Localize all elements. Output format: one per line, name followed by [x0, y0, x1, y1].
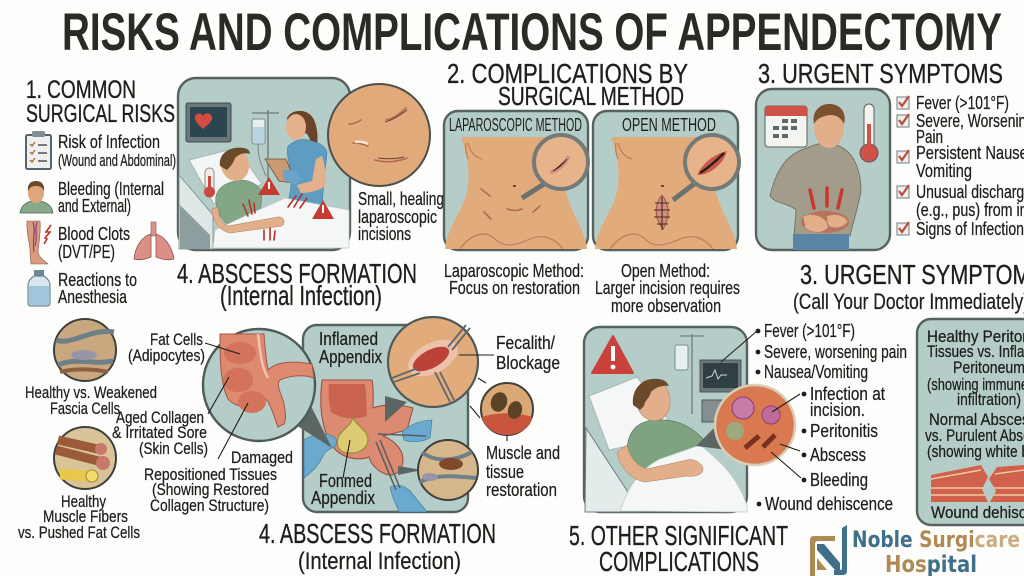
- icon: calendar: [765, 106, 807, 147]
- logo: noble surgicare hospital: [810, 525, 1020, 576]
- icon: person: [20, 181, 53, 213]
- icon: magnified incisions: [328, 84, 430, 186]
- heading: abscess formation upper: [177, 258, 417, 311]
- text: formed appendix label: Fonmed: [319, 471, 372, 491]
- icon: bottle: [28, 270, 50, 306]
- heading: complications by surgical method: SURGICAL METHOD: [498, 81, 684, 111]
- icon: fascia cells circle: [54, 319, 116, 381]
- icon: magnified infected cells: [696, 385, 795, 465]
- text: method captions: Focus on restoration: [449, 278, 580, 298]
- text: muscle restoration label: tissue: [486, 462, 524, 482]
- illustration: nurse: [265, 111, 327, 208]
- illustration: laparoscopic torso: [445, 137, 587, 249]
- list: symptom bullets: Fever (>101°F): [764, 321, 855, 341]
- text: bleeding: and External): [58, 196, 131, 216]
- list: symptom bullets: Peritonitis: [810, 421, 878, 441]
- icon: fecalith circle: [481, 383, 533, 435]
- illustration: open torso: [595, 137, 737, 249]
- list: symptom bullets: [721, 321, 907, 514]
- icon: heart monitor: [186, 103, 231, 142]
- text: small healing incisions: [358, 189, 444, 244]
- panel: abscess surgery: [303, 325, 468, 512]
- text: muscle caption: Healthy: [61, 493, 107, 511]
- heading: complications by surgical method: 2. COMPLICATIONS BY: [447, 58, 688, 89]
- illustration: bed and pillow: [179, 148, 262, 249]
- icon: magnified forceps circle: [385, 317, 478, 422]
- text: aged collagen label: & Irritated Sore: [112, 424, 207, 442]
- text: method captions: Larger incision requires: [595, 278, 740, 298]
- icon: red pain marks: [243, 194, 307, 240]
- text: fascia caption: Fascia Cells: [50, 400, 120, 418]
- text: fecalith label: Fecalith/: [496, 333, 555, 353]
- text: reactions to anesthesia: Reactions to: [58, 270, 137, 290]
- text: fascia caption: [25, 384, 157, 418]
- list: symptom bullets: Infection at: [810, 384, 885, 404]
- text: method captions: more observation: [611, 296, 721, 316]
- icon: warning triangles: [258, 177, 334, 219]
- text: damaged repositioned tissues label: Repositioned Tissues: [144, 466, 277, 484]
- text: laparoscopic method label: LAPAROSCOPIC METHOD: [449, 115, 582, 135]
- text: reactions to anesthesia: [58, 270, 137, 307]
- icon: iv drip: [252, 110, 279, 180]
- illustration: gloved hands and forceps: [304, 420, 432, 512]
- text: risk of infection: Risk of Infection: [58, 132, 160, 152]
- text: bleeding: [58, 179, 164, 216]
- text: abscess comparison: [925, 411, 1024, 461]
- icon: lungs: [134, 222, 174, 260]
- heading: abscess formation lower: (Internal Infection): [298, 548, 461, 575]
- panel: laparoscopic method: [444, 111, 588, 250]
- text: open method label: OPEN METHOD: [622, 115, 716, 135]
- illustration: man in pain: [770, 104, 861, 250]
- illustration: bed and pillow: [585, 377, 679, 512]
- illustration: iv and monitor: [675, 334, 741, 422]
- text: fat cells label: [128, 331, 205, 365]
- text: formed appendix label: Appendix: [311, 488, 375, 508]
- text: damaged repositioned tissues label: (Showing Restored: [152, 481, 269, 499]
- text: logo wordmark: Noble Surgicare: [852, 528, 1020, 553]
- illustration: patient: [212, 146, 349, 248]
- text: method captions: Laparoscopic Method:: [444, 261, 584, 281]
- list: symptom bullets: Severe, worsening pain: [764, 342, 907, 362]
- heading: complications by surgical method: [447, 58, 688, 111]
- heading: urgent symptoms lower: [793, 259, 1024, 314]
- list: symptom bullets: Wound dehiscence: [765, 494, 893, 514]
- bullets: [756, 329, 806, 506]
- text: method captions: Open Method:: [621, 261, 710, 281]
- heading: abscess formation upper: (Internal Infection): [220, 280, 382, 311]
- text: inflamed appendix label: Appendix: [319, 347, 382, 367]
- text: fecalith label: [496, 333, 560, 373]
- text: inflamed appendix label: Inflamed: [319, 329, 378, 349]
- text: small healing incisions: laparoscopic: [358, 207, 437, 227]
- icon: restored tissue circle: [398, 440, 478, 500]
- text: muscle caption: [18, 493, 140, 542]
- heading: abscess formation upper: 4. ABSCESS FORMATION: [177, 258, 417, 289]
- text: aged collagen label: [112, 409, 208, 458]
- text: aged collagen label: Aged Collagen: [116, 409, 204, 427]
- icon: magnifier on open wound: [673, 135, 739, 200]
- icon: thermometer: [204, 168, 215, 198]
- illustration: torn tissue layers: [931, 465, 1024, 502]
- checklist: urgent symptoms: [897, 93, 1024, 239]
- text: risk of infection: (Wound and Abdominal): [58, 152, 176, 170]
- leader lines: abscess labels: [205, 343, 507, 459]
- text: damaged repositioned tissues label: Collagen Structure): [150, 497, 269, 515]
- text: blood clots: (DVT/PE): [58, 242, 115, 262]
- text: damaged repositioned tissues label: Damaged: [231, 449, 293, 467]
- text: blood clots: Blood Clots: [58, 224, 130, 244]
- icons: check boxes: [897, 96, 909, 235]
- text: small healing incisions: Small, healing: [358, 189, 444, 209]
- text: muscle caption: Muscle Fibers: [43, 508, 128, 526]
- heading: abscess formation lower: [259, 518, 496, 575]
- text: fat cells label: (Adipocytes): [128, 347, 205, 365]
- heading: other significant complications: [569, 520, 788, 576]
- panel: hospital scene with nurse: [178, 78, 350, 250]
- list: symptom bullets: Nausea/Vomiting: [764, 362, 868, 382]
- icon: clipboard: [26, 131, 51, 169]
- text: damaged repositioned tissues label: [144, 449, 293, 515]
- text: blood clots: [58, 224, 130, 262]
- checklist: urgent symptoms: Pain: [916, 127, 943, 147]
- icon: leg with veins: [27, 221, 51, 264]
- text: peritoneal tissue comparison: [927, 328, 1024, 409]
- heading: common surgical risks: SURGICAL RISKS: [26, 100, 175, 128]
- heading: common surgical risks: [26, 76, 175, 128]
- list: symptom bullets: Bleeding: [810, 470, 868, 490]
- illustration: patient: [617, 376, 747, 512]
- text: bleeding: Bleeding (Internal: [58, 179, 164, 199]
- text: aged collagen label: (Skin Cells): [139, 440, 208, 458]
- icon: logo mark: [810, 525, 847, 576]
- text: inflamed appendix label: [319, 329, 382, 367]
- icon: callout pointer to colon: [296, 404, 332, 448]
- text: fascia caption: Healthy vs. Weakened: [25, 384, 157, 402]
- icon: magnifier on small incision: [522, 135, 588, 198]
- text: muscle caption: vs. Pushed Fat Cells: [18, 524, 140, 542]
- list: symptom bullets: incision.: [810, 400, 865, 420]
- list: symptom bullets: Abscess: [810, 445, 866, 465]
- text: risk of infection: [58, 132, 176, 170]
- text: fecalith label: Blockage: [496, 353, 560, 373]
- text: method captions: [444, 261, 740, 316]
- panel: common surgical risks: [20, 76, 176, 307]
- icon: magnified colon circle: [203, 329, 315, 441]
- text: logo wordmark: [852, 528, 1020, 576]
- icon: muscle fibers circle: [54, 427, 116, 489]
- text: muscle restoration label: Muscle and: [486, 443, 560, 463]
- icon: warning triangle: [592, 336, 633, 373]
- checklist: urgent symptoms: Vomiting: [916, 161, 972, 181]
- heading: common surgical risks: 1. COMMON: [26, 76, 136, 104]
- text: muscle restoration label: restoration: [486, 480, 557, 500]
- text: reactions to anesthesia: Anesthesia: [58, 287, 128, 307]
- panel: man with abdominal pain: [756, 89, 890, 250]
- icon: thermometer: [860, 104, 878, 162]
- panel: open method: [593, 111, 739, 250]
- text: fat cells label: Fat Cells: [150, 331, 203, 349]
- text: muscle restoration label: [486, 443, 560, 500]
- heading: other significant complications: 5. OTHER SIGNIFICANT: [569, 520, 788, 551]
- heading: abscess formation lower: 4. ABSCESS FORMATION: [259, 518, 496, 549]
- text: small healing incisions: incisions: [358, 224, 411, 244]
- leader lines: bullets to illustration: [721, 331, 801, 478]
- panel: tissue comparison: [917, 319, 1024, 525]
- panel: patient in bed with warning: [584, 327, 747, 512]
- illustration: inflamed colon and abscess: [321, 380, 413, 478]
- text: formed appendix label: [311, 471, 375, 508]
